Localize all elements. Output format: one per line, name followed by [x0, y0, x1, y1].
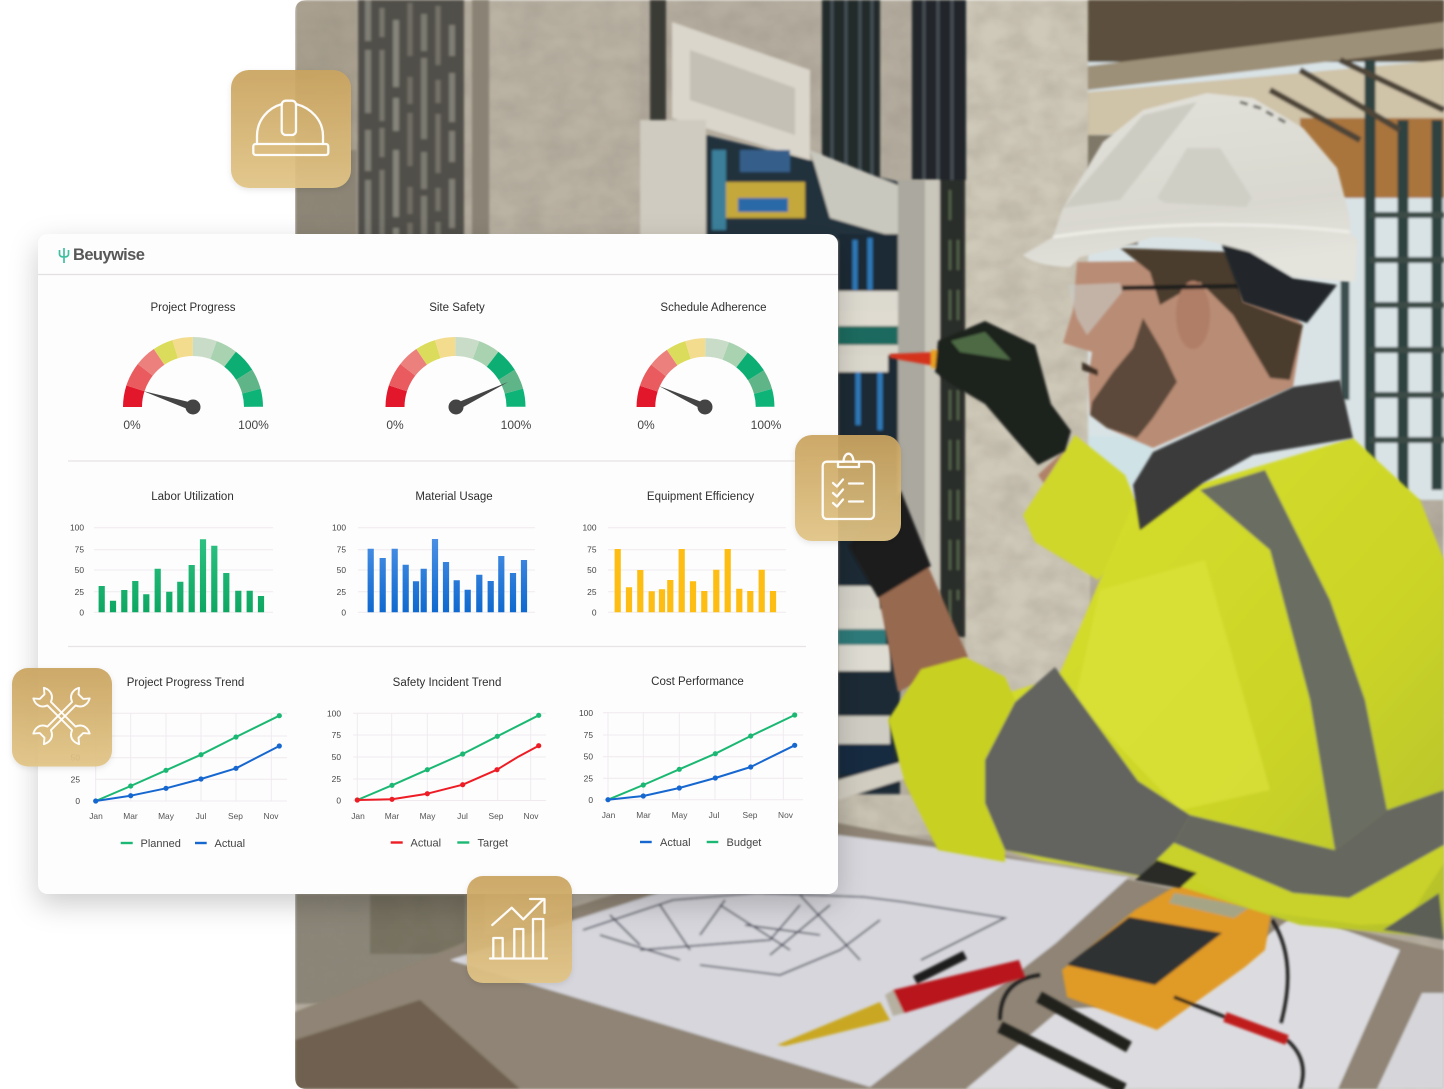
icon: cactus logo	[60, 248, 68, 263]
line chart: Cost Performance: Jan	[602, 810, 616, 820]
icon tile: hard hat	[231, 70, 351, 188]
brand header	[60, 246, 145, 264]
gauge: Schedule Adherence	[637, 302, 782, 432]
line chart: Safety Incident Trend: Actual	[410, 838, 441, 850]
line chart: Cost Performance: Cost Performance	[651, 676, 744, 688]
line chart: Cost Performance: 100	[579, 708, 593, 718]
line chart: Safety Incident Trend: 100	[327, 708, 341, 718]
line chart: Cost Performance: Nov	[778, 810, 794, 820]
line chart: Safety Incident Trend: Mar	[385, 811, 399, 821]
gauge: Site Safety	[386, 302, 532, 432]
photo: electrician working on a panel at a construction site	[295, 0, 1444, 1089]
line chart: Project Progress Trend: May	[158, 811, 175, 821]
photo: tabletop and blueprints	[295, 823, 1444, 1089]
line chart: Cost Performance: Budget	[726, 837, 761, 849]
bar chart: Material Usage: 50	[337, 565, 346, 575]
bar chart: Material Usage: 0	[341, 608, 346, 618]
photo: worker collar	[1133, 380, 1353, 530]
line chart: Project Progress Trend: Jan	[89, 811, 103, 821]
photo: raised hand sleeve and forearm	[1023, 435, 1138, 580]
gauge: Schedule Adherence: 100%	[751, 418, 782, 432]
gauge: Site Safety: Site Safety	[429, 302, 485, 314]
line chart: Cost Performance: Jul	[709, 810, 719, 820]
photo: worker high-visibility jacket	[888, 438, 1444, 940]
bar chart: Labor Utilization: 0	[79, 608, 84, 618]
bar chart: Material Usage: Material Usage	[415, 491, 493, 503]
gauge: Site Safety: 0%	[386, 418, 404, 432]
line chart: Safety Incident Trend	[327, 677, 546, 850]
line chart: Project Progress Trend: 0	[75, 796, 80, 806]
bar chart: Labor Utilization: 100	[70, 522, 84, 532]
photo: electrical panel with breakers	[640, 22, 940, 800]
line chart: Cost Performance: May	[672, 810, 688, 820]
gauge: Project Progress: 0%	[123, 418, 141, 432]
photo: worker neck and face	[1063, 248, 1303, 448]
bar chart: Labor Utilization: 25	[75, 587, 84, 597]
gauge: Project Progress	[123, 302, 269, 432]
line chart: Cost Performance: 0	[588, 795, 593, 805]
line chart: Project Progress Trend: Nov	[264, 811, 279, 821]
gauge: Schedule Adherence: 0%	[637, 418, 655, 432]
line chart: Cost Performance: 50	[584, 752, 593, 762]
photo background: ceiling and scaffold	[1088, 0, 1444, 500]
line chart: Project Progress Trend: Actual	[214, 838, 245, 850]
bar chart: Material Usage: 25	[337, 587, 346, 597]
photo: gloved hand with screwdriver	[890, 321, 1071, 465]
bar chart: Labor Utilization: 75	[75, 544, 84, 554]
bar chart: Labor Utilization	[70, 491, 273, 618]
bar chart: Equipment Efficiency: Equipment Efficiency	[647, 491, 754, 503]
icon tile: rising bar chart	[467, 876, 572, 983]
line chart: Safety Incident Trend: Target	[478, 838, 508, 850]
line chart: Cost Performance: Sep	[743, 810, 758, 820]
line chart: Safety Incident Trend: May	[420, 811, 436, 821]
line chart: Cost Performance	[579, 676, 803, 849]
bar chart: Material Usage: 100	[332, 522, 346, 532]
line chart: Project Progress Trend: Planned	[140, 838, 181, 850]
line chart: Safety Incident Trend: Nov	[524, 811, 539, 821]
bar chart: Material Usage: 75	[337, 544, 346, 554]
line chart: Project Progress Trend: Mar	[123, 811, 138, 821]
bar chart: Equipment Efficiency: 100	[583, 522, 597, 532]
line chart: Safety Incident Trend: 25	[332, 774, 341, 784]
line chart: Project Progress Trend: Sep	[228, 811, 243, 821]
icon tile: crossed wrenches	[12, 668, 112, 766]
line chart: Project Progress Trend	[71, 677, 287, 850]
bar chart: Labor Utilization: 50	[75, 565, 84, 575]
icon tile: clipboard checklist	[795, 435, 901, 541]
bar chart: Equipment Efficiency: 75	[587, 544, 597, 554]
gauge: Project Progress: 100%	[238, 418, 269, 432]
gauge: Project Progress: Project Progress	[150, 302, 236, 314]
line chart: Project Progress Trend: 25	[71, 774, 80, 784]
line chart: Cost Performance: 25	[584, 774, 593, 784]
line chart: Cost Performance: Actual	[660, 837, 691, 849]
line chart: Safety Incident Trend: 0	[336, 796, 341, 806]
bar chart: Equipment Efficiency	[583, 491, 786, 618]
line chart: Project Progress Trend: Project Progress Trend	[127, 677, 244, 689]
dashboard card	[38, 234, 838, 894]
photo: worker lower arm and glove	[848, 491, 968, 692]
gauge: Schedule Adherence: Schedule Adherence	[660, 302, 767, 314]
line chart: Safety Incident Trend: 50	[332, 752, 341, 762]
line chart: Safety Incident Trend: Sep	[489, 811, 504, 821]
photo: white hard hat	[1023, 93, 1358, 323]
line chart: Safety Incident Trend: Jan	[351, 811, 365, 821]
bar chart: Material Usage	[332, 491, 535, 618]
line chart: Safety Incident Trend: 75	[332, 730, 341, 740]
line chart: Safety Incident Trend: Safety Incident Trend	[393, 677, 501, 689]
gauge: Site Safety: 100%	[501, 418, 532, 432]
line chart: Cost Performance: Mar	[636, 810, 651, 820]
line chart: Safety Incident Trend: Jul	[457, 811, 468, 821]
line chart: Project Progress Trend: Jul	[196, 811, 206, 821]
photo: multimeter and tools	[777, 880, 1303, 1089]
line chart: Cost Performance: 75	[584, 730, 593, 740]
bar chart: Labor Utilization: Labor Utilization	[151, 491, 234, 503]
photo: vertical cable bundles	[358, 0, 966, 637]
bar chart: Equipment Efficiency: 0	[592, 608, 597, 618]
line chart: Project Progress Trend: 50	[71, 752, 80, 762]
bar chart: Equipment Efficiency: 25	[587, 587, 597, 597]
brand name: Beuywise	[73, 246, 145, 264]
bar chart: Equipment Efficiency: 50	[587, 565, 597, 575]
photo background: concrete wall	[295, 0, 1444, 1089]
